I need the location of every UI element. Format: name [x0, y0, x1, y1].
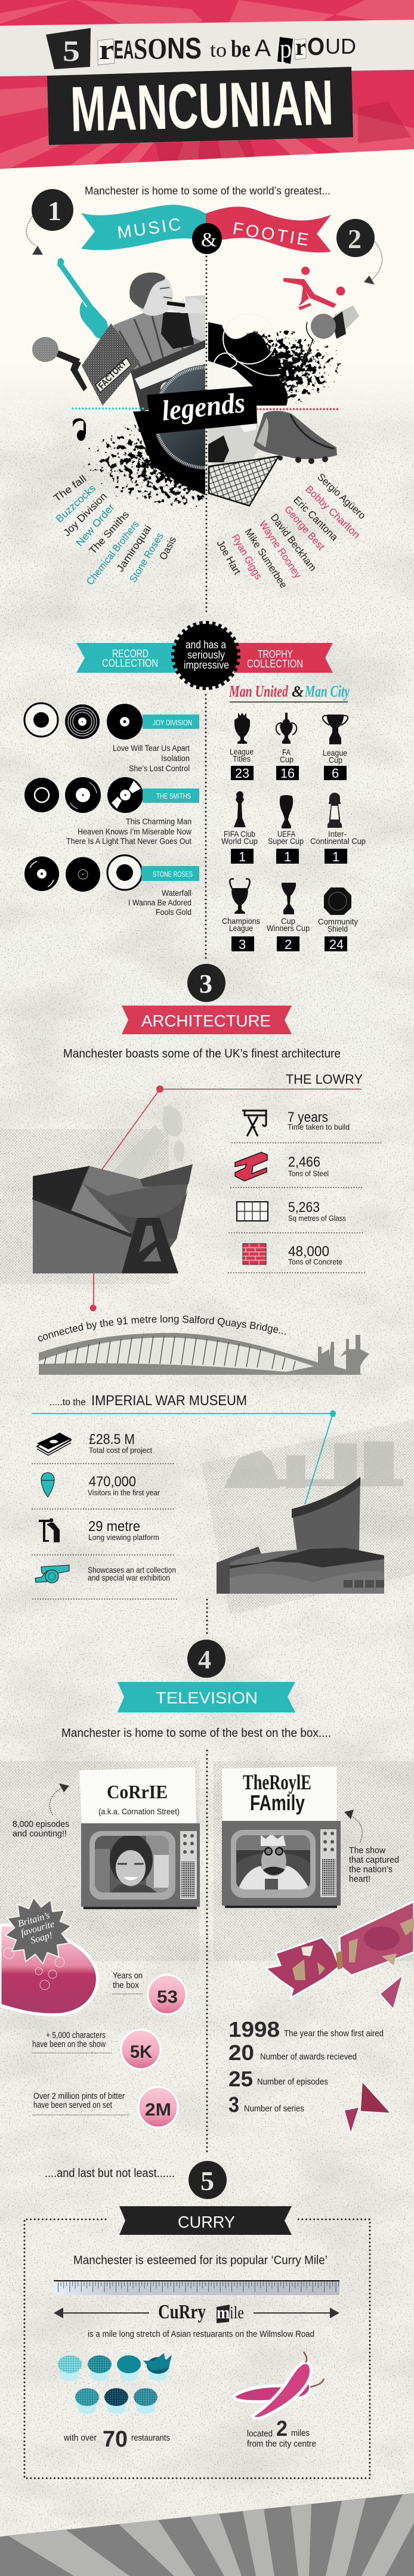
curry mile wordmark: m — [217, 2303, 230, 2323]
icon: goal net — [209, 456, 279, 506]
ribbon: trophy collection: TROPHY — [258, 648, 293, 660]
trophy: League Titles: Titles — [233, 754, 251, 763]
stat: 1998: The year the show first aired — [284, 2028, 384, 2039]
stat: 5,263 sq metres of glass: 5,263 — [288, 1199, 320, 1216]
dotted divider for television section — [206, 1751, 208, 2152]
list: football legends: Bobby Charlton — [303, 483, 362, 541]
halftone strip behind TVs — [0, 1761, 414, 1961]
stat: 2M pints: Over 2 million pints of bitter — [33, 2091, 125, 2101]
stat: 7 years: 7 years — [288, 1109, 328, 1125]
ampersand badge: & — [201, 229, 217, 251]
tag: THE SMITHS — [156, 791, 191, 800]
illustration: The Lowry building — [33, 1164, 193, 1273]
starburst: and has a seriously impressive — [174, 624, 237, 687]
trophy: League Cup — [323, 715, 348, 781]
trophy: FA Cup — [276, 713, 299, 781]
trophy: UEFA Super Cup — [268, 795, 304, 864]
stat: 25: Number of episodes — [257, 2077, 328, 2087]
banner: television: TELEVISION — [156, 1689, 258, 1707]
ribbon: trophy collection: COLLECTION — [247, 658, 303, 670]
starburst: Britain's favourite soap — [1, 1893, 76, 1968]
footer: grey sunburst — [0, 2493, 414, 2576]
songs: She’s Lost Control — [129, 763, 190, 773]
callout: the show that captured: the nation’s — [349, 1864, 393, 1875]
heading: Man United & Man City: Man City — [304, 682, 350, 700]
heading: Man United & Man City: & — [292, 683, 304, 700]
stat: located 2 miles: from the city centre — [247, 2439, 316, 2449]
cracker right half — [339, 1901, 414, 1975]
stat: 470,000: 470,000 — [89, 1474, 136, 1490]
starburst: Britain's favourite soap: Britain’s — [17, 1910, 51, 1929]
stat: 48,000 tons of concrete: 48,000 — [288, 1244, 329, 1260]
list: music legends: Jamiroquai — [115, 523, 154, 574]
number 5 badge: 5 — [200, 2166, 214, 2196]
curry mile wordmark: ile — [230, 2303, 244, 2323]
cut-out letters line: p — [280, 34, 292, 63]
heading: Man United & Man City — [228, 682, 350, 702]
main ink — [208, 322, 288, 406]
cracker left half — [265, 1937, 342, 1998]
trophy: Community Shield: 24 — [329, 937, 344, 952]
stat: 2,466 tons of steel — [235, 1152, 329, 1181]
stat: 470,000 — [41, 1473, 160, 1497]
stat: 3: Number of series — [244, 2104, 304, 2114]
trophy: UEFA Super Cup: 1 — [284, 849, 291, 864]
starburst: and has a seriously impressive: seriously — [187, 649, 225, 661]
stat: 25: 25 — [228, 2067, 253, 2091]
panel: Corrie: (a.k.a. Cornation Street) — [98, 1807, 180, 1816]
list: football legends: George Best — [282, 503, 327, 552]
trophy: Champions League: 3 — [239, 937, 246, 952]
stat: showcases art collection — [35, 1565, 176, 1583]
list: music legends: New Order — [74, 501, 117, 549]
callout: the show that captured: that captured — [349, 1855, 399, 1865]
cut-out letters line — [98, 32, 356, 66]
icon: guitar — [57, 258, 108, 339]
stat: 53 years on the box — [113, 1971, 186, 2014]
callout: 8,000 episodes: and counting!! — [13, 1829, 67, 1839]
panel: The Royle Family — [222, 1767, 341, 1908]
trophy: League Titles — [230, 713, 254, 781]
list: football legends: Sergio Agüero — [315, 471, 368, 521]
architecture intro: Manchester boasts some of the UK’s finest architecture — [63, 1047, 341, 1060]
cut-out letters line: be — [231, 35, 251, 62]
trophy: League Titles: 23 — [235, 766, 249, 781]
list: music legends: Buzzcocks — [54, 483, 98, 525]
stat: 20: Number of awards recieved — [260, 2052, 357, 2062]
vinyls — [24, 777, 143, 813]
number 3 badge: 3 — [199, 969, 212, 998]
list: football legends — [215, 471, 368, 590]
banner: footie — [206, 206, 331, 252]
cracker shards — [380, 1975, 403, 2009]
songs: Heaven Knows I’m Miserable Now — [78, 827, 192, 836]
legends black tag: legends — [160, 387, 246, 427]
trophy: Community Shield — [318, 887, 358, 952]
stat: 29 metre — [39, 1519, 159, 1542]
stat: over 70 restaurants — [63, 2427, 170, 2452]
cut-out letters line: O — [307, 32, 325, 60]
stat: located 2 miles — [247, 2416, 316, 2449]
heading: Man United & Man City: Man United — [228, 682, 288, 700]
number 3 badge — [187, 964, 225, 1002]
curry intro: Manchester is esteemed for its popular ‘Curry Mile’ — [73, 2254, 328, 2267]
list: football legends: Mike Sumerbee — [243, 527, 289, 590]
number 1 badge — [26, 189, 73, 255]
songs — [113, 743, 190, 773]
number 4 badge: 4 — [198, 1645, 211, 1674]
ribbon: trophy collection — [234, 643, 333, 673]
record collection: Joy Division — [24, 703, 199, 773]
TV photo: smiling woman — [95, 1835, 169, 1894]
heading: to the Imperial War Museum: IMPERIAL WAR MUSEUM — [91, 1393, 247, 1409]
list: music legends: Stone Roses — [127, 531, 166, 585]
illustration: Christmas cracker — [265, 1901, 414, 2133]
Corrie title: CoRrIE — [107, 1781, 168, 1802]
icon: person at viewfinder — [39, 1519, 60, 1542]
trophy: Community Shield: Shield — [328, 924, 348, 933]
stat: 20 — [228, 2040, 357, 2065]
stat: 5,263 sq metres of glass: Sq metres of Glass — [288, 1214, 346, 1223]
curry mile wordmark: CuRry — [158, 2301, 206, 2323]
arrow: curry mile span left — [54, 2308, 149, 2318]
stat: 20: 20 — [228, 2040, 254, 2065]
dotted connector teal — [73, 407, 146, 410]
ink splatter — [84, 425, 205, 509]
stat: £28.5 M: Total cost of project — [89, 1446, 152, 1455]
list: football legends: Wayne Rooney — [257, 519, 304, 580]
tag: JOY DIVISION — [153, 718, 192, 727]
Royle title: FAmily — [250, 1790, 305, 1815]
Royle title — [243, 1770, 311, 1815]
banner: footie: FOOTIE — [231, 219, 312, 251]
stat: 5K characters: have been on the show — [32, 2039, 106, 2049]
ribbon: record collection — [76, 643, 179, 673]
singer — [113, 273, 205, 382]
TV photo: man with paper crown — [236, 1834, 310, 1891]
stat: 2M pints — [33, 2087, 178, 2127]
stat: 2,466 tons of steel: 2,466 — [288, 1154, 320, 1170]
cut-out letters line: SO — [134, 32, 167, 65]
connector: Lowry red line — [89, 1086, 362, 1311]
icon: cannon — [35, 1565, 69, 1583]
stat: located 2 miles: miles — [291, 2428, 310, 2438]
trophy: Inter-Continental Cup: Continental Cup — [310, 836, 366, 846]
icon: microphone — [32, 337, 87, 391]
banner: architecture — [122, 1006, 292, 1034]
trophy: FIFA Club World Cup: World Cup — [221, 836, 258, 846]
trophy: Cup Winners Cup: Winners Cup — [267, 923, 310, 933]
list: football legends: David Beckham — [268, 512, 319, 573]
panel: Corrie — [79, 1767, 200, 1909]
callout: the show that captured — [344, 1810, 399, 1884]
cut-out letters line: to — [210, 39, 227, 61]
connector: IWM teal line — [32, 1410, 336, 1504]
stat: 53 years on the box: 53 — [157, 1987, 178, 2007]
list: football legends: Joe Hart — [215, 538, 243, 577]
TV set — [81, 1823, 200, 1909]
callout: the show that captured: heart! — [349, 1874, 370, 1884]
stat: showcases art collection: and special war exhibition — [88, 1573, 170, 1582]
black 5 tile — [46, 28, 91, 69]
ball — [208, 423, 259, 465]
callout: the show that captured: The show — [349, 1845, 385, 1856]
stat: 3: 3 — [228, 2092, 239, 2117]
stat: located 2 miles: located — [247, 2429, 273, 2439]
tag — [141, 866, 199, 881]
cut-out letters line: EA — [114, 35, 134, 64]
vinyls — [24, 703, 143, 740]
stat: £28.5 M: £28.5 M — [89, 1431, 135, 1448]
starburst: and has a seriously impressive: impressive — [184, 659, 229, 671]
ribbon: record collection: COLLECTION — [102, 657, 158, 669]
callout: 8,000 episodes: 8,000 episodes — [13, 1819, 69, 1829]
icon: whistle — [292, 305, 359, 376]
illustration: Salford Quays bridge — [39, 1333, 369, 1375]
title: 5 reasons to be a proud — [46, 28, 356, 69]
dotted connector to section 4 — [206, 1600, 208, 1637]
list: music legends: Chemical Brothers — [84, 519, 141, 587]
banner: architecture: ARCHITECTURE — [141, 1012, 271, 1030]
number 2 badge — [336, 219, 382, 284]
stat: 1998: 1998 — [228, 2017, 280, 2042]
header: red sunburst banner — [0, 0, 414, 173]
icon: banknotes — [37, 1433, 71, 1455]
list: music legends — [51, 473, 178, 587]
trophy: Cup Winners Cup — [267, 883, 310, 952]
heading: The Lowry: THE LOWRY — [286, 1072, 363, 1087]
icon: footballer tackling — [283, 267, 345, 310]
stat: 1998 — [228, 2017, 384, 2042]
trophy: Champions League: Champions — [222, 916, 260, 926]
banner: curry — [119, 2206, 292, 2235]
dotted connector red — [257, 408, 341, 410]
trophy: Inter-Continental Cup: 1 — [332, 849, 339, 864]
stat: 5K characters — [32, 2030, 160, 2069]
turntable — [155, 365, 205, 470]
number 5 badge — [189, 2161, 227, 2199]
trophy: League Cup: League — [323, 748, 347, 757]
list: music legends: Joy Division — [61, 490, 109, 539]
number 1 badge: 1 — [48, 196, 61, 226]
icon: boot — [254, 411, 337, 464]
stat: 29 metre: 29 metre — [88, 1519, 140, 1535]
starburst: Britain's favourite soap: Soap! — [29, 1930, 54, 1946]
trophy: FA Cup: FA — [282, 747, 291, 757]
stat: 2M pints: 2M — [145, 2100, 171, 2120]
icon: music note — [73, 418, 86, 441]
curved caption: connected by the bridge: connected by the 91 metre long Salford Quays Bridge... — [38, 1315, 286, 1341]
Royle stats — [228, 2017, 384, 2117]
songs: This Charming Man — [126, 817, 191, 826]
arrow: curry mile span right — [254, 2308, 339, 2318]
central dotted divider upper — [205, 256, 208, 616]
icon: map pin — [41, 1473, 54, 1497]
trophy: FIFA Club World Cup: 1 — [239, 849, 246, 864]
icon: crane — [242, 1111, 267, 1136]
list: football legends: Ryan Giggs — [230, 532, 264, 582]
stat: located 2 miles: 2 — [276, 2416, 288, 2441]
stat: £28.5 M — [37, 1431, 152, 1455]
ribbon: record collection: RECORD — [112, 648, 149, 660]
stat: over 70 restaurants: 70 — [103, 2427, 128, 2452]
black 5 tile: 5 — [63, 34, 80, 67]
record collection: Stone Roses — [24, 855, 199, 917]
dotted curry frame — [24, 2219, 370, 2478]
songs: Isolation — [161, 753, 190, 763]
banner: music — [81, 205, 206, 250]
list: music legends: The fall — [51, 473, 88, 504]
trophy: FIFA Club World Cup: FIFA Club — [224, 829, 255, 839]
songs: Love Will Tear Us Apart — [113, 743, 190, 753]
songs — [128, 888, 191, 917]
trophy: Inter-Continental Cup — [310, 793, 366, 864]
illustration: pink soap — [0, 1925, 97, 2015]
trophy: FIFA Club World Cup — [221, 791, 258, 864]
tag — [143, 715, 199, 729]
stat: 5K characters: + 5,000 characters — [46, 2030, 106, 2040]
central dotted divider middle — [205, 695, 206, 961]
stat: 470,000: Visitors in the first year — [88, 1488, 160, 1497]
TV set — [222, 1821, 341, 1908]
record collection: The Smiths — [24, 777, 199, 846]
curry description: is a mile long stretch of Asian restuarants on the Wilmslow Road — [88, 2329, 314, 2339]
trophy: UEFA Super Cup: Super Cup — [268, 836, 304, 846]
heading: to the Imperial War Museum: .....to the — [50, 1397, 86, 1408]
curry mile wordmark — [158, 2301, 244, 2323]
icon: steel beam — [235, 1152, 267, 1181]
trophy: Community Shield: Community — [318, 917, 358, 926]
stat: 2,466 tons of steel: Tons of Steel — [288, 1169, 329, 1178]
cut-out letters line: r — [99, 34, 114, 66]
trophy: League Cup: Cup — [329, 755, 342, 765]
stat: 7 years: Time taken to build — [288, 1122, 350, 1131]
list: music legends: The Smiths — [87, 509, 131, 556]
songs: I Wanna Be Adored — [128, 898, 191, 907]
trophy: FA Cup: 16 — [280, 766, 295, 781]
list: football legends: Eric Cantona — [291, 494, 341, 543]
songs: Fools Gold — [156, 907, 191, 917]
trophy: Champions League: League — [229, 923, 253, 933]
trophy: Inter-Continental Cup: Inter- — [328, 829, 347, 839]
banner: curry: CURRY — [178, 2213, 235, 2231]
stat: showcases art collection: Showcases an art collection — [88, 1565, 176, 1575]
header: pale torn strip — [0, 20, 414, 76]
stat: 5,263 sq metres of glass — [237, 1199, 346, 1223]
Lowry crane ghost — [107, 1106, 184, 1184]
songs — [66, 817, 192, 846]
stat: 2M pints: have been served on set — [33, 2100, 113, 2110]
music collage: singer, amp, boombox, turntable — [82, 272, 205, 509]
ampersand badge — [192, 223, 222, 254]
illustration: ruler — [54, 2280, 339, 2295]
stat: 5K characters: 5K — [130, 2042, 152, 2062]
cut-out letters line: A — [255, 35, 271, 61]
tag: STONE ROSES — [153, 870, 193, 879]
trophy: League Cup: 6 — [332, 766, 339, 781]
stat: over 70 restaurants: with over — [63, 2433, 97, 2443]
icon: bricks — [243, 1244, 266, 1264]
callout: 8,000 episodes — [13, 1783, 69, 1839]
icons: spice pots — [58, 2353, 172, 2414]
stat: 29 metre: Long viewing platform — [88, 1533, 159, 1542]
banner: music: MUSIC — [116, 215, 184, 243]
trophy: League Titles: League — [230, 747, 254, 756]
starburst: and has a seriously impressive: and has a — [186, 639, 227, 651]
IWM ghost city skyline — [224, 1442, 403, 1488]
stat: 25 — [228, 2067, 328, 2091]
songs: Waterfall — [162, 888, 191, 898]
stat: over 70 restaurants: restaurants — [131, 2433, 170, 2443]
IWM halftone backdrop — [202, 1420, 414, 1615]
icon: window — [237, 1202, 268, 1221]
cut-out letters line: UD — [325, 34, 356, 58]
stat: 7 years — [242, 1109, 350, 1136]
stat: 48,000 tons of concrete — [243, 1244, 342, 1266]
cut-out letters line: r — [295, 33, 306, 60]
songs: There Is A Light That Never Goes Out — [66, 836, 191, 846]
stat: 3 — [228, 2092, 304, 2117]
cut-out letters line: NS — [167, 32, 202, 65]
boombox — [131, 340, 205, 412]
stat: 53 years on the box: the box — [113, 1980, 139, 1990]
Royle title: TheRoylE — [243, 1770, 311, 1794]
trophy: FA Cup: Cup — [280, 754, 293, 764]
stat: 53 years on the box: Years on — [113, 1971, 143, 1981]
trophy: UEFA Super Cup: UEFA — [277, 829, 296, 839]
amp — [82, 323, 140, 406]
stat: 48,000 tons of concrete: Tons of Concrete — [288, 1257, 342, 1266]
starburst: Britain's favourite soap: favourite — [20, 1919, 55, 1938]
amp: FACTORY — [97, 358, 129, 391]
intro sentence: Manchester is home to some of the world’s greatest... — [85, 185, 330, 197]
vinyls — [24, 855, 142, 892]
tag — [143, 788, 199, 803]
lead-in: last but not least: ....and last but not least...... — [45, 2167, 175, 2180]
banner: television — [118, 1682, 295, 1712]
earphone cord — [214, 330, 280, 376]
list: music legends: Oasis — [157, 535, 178, 562]
Lowry halftone backdrop — [0, 1129, 169, 1284]
footie collage: splatter, earphones, ball, boot, net — [208, 322, 346, 465]
illustration: chilli peppers — [234, 2352, 324, 2419]
television intro: Manchester is home to some of the best on the box.... — [61, 1727, 331, 1740]
number 4 badge — [187, 1640, 225, 1678]
trophy: Cup Winners Cup: 2 — [285, 937, 292, 952]
number 2 badge: 2 — [348, 224, 362, 254]
trophy: Champions League — [222, 879, 260, 952]
illustration: Imperial War Museum — [217, 1477, 384, 1594]
trophy: Cup Winners Cup: Cup — [281, 916, 295, 926]
